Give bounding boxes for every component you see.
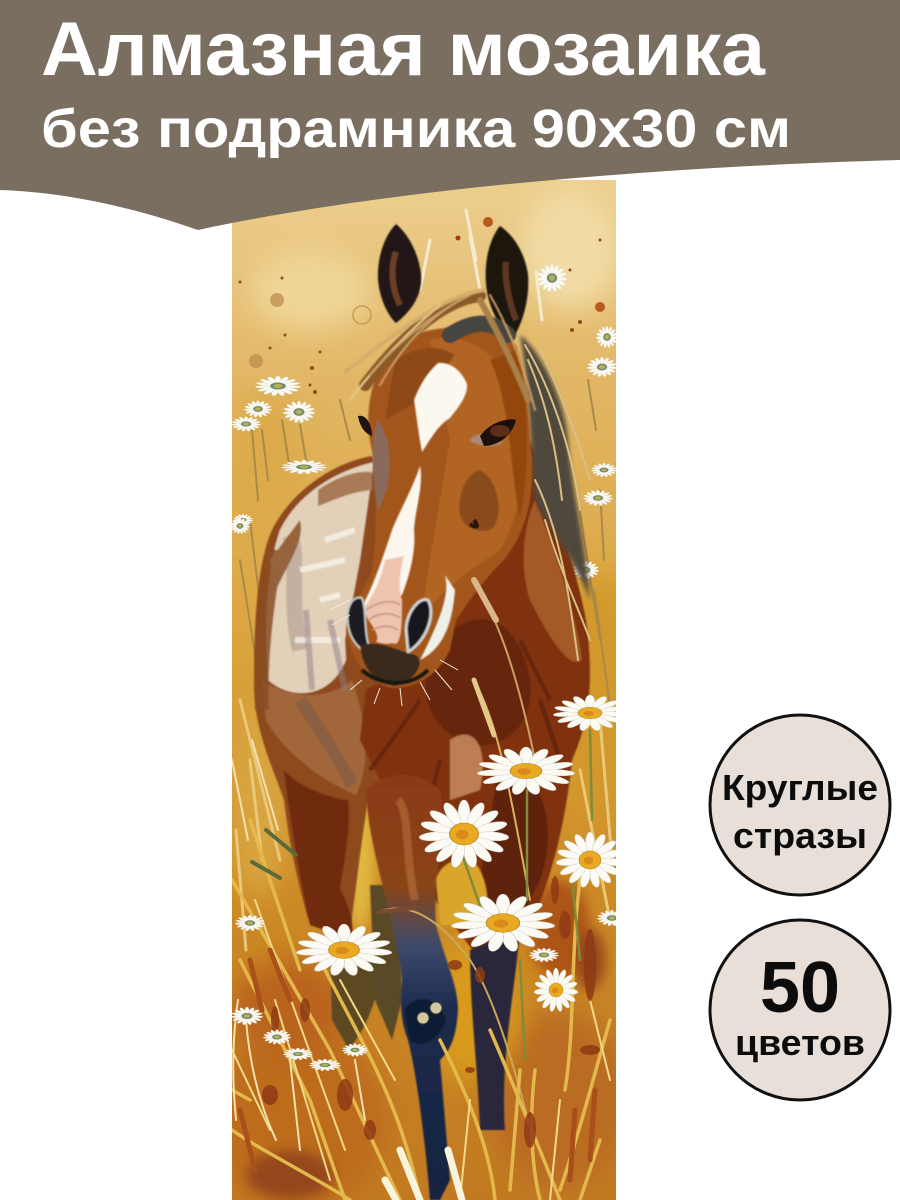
painting background wash	[232, 180, 616, 1200]
red-brown splatters	[262, 876, 600, 1148]
eyes	[358, 416, 516, 527]
large daisies in the foreground	[231, 695, 627, 1071]
seed pods on the hoof	[417, 1002, 442, 1024]
neck and chest	[360, 440, 590, 960]
header banner	[0, 0, 900, 230]
subtitle: без подрамника 90х30 см	[41, 99, 791, 159]
paint splatter spots	[238, 217, 605, 394]
white blaze	[360, 363, 467, 660]
foreground grass	[232, 730, 610, 1200]
hind leg	[284, 770, 352, 940]
badge: round rhinestones	[710, 715, 890, 895]
badge: round rhinestones: стразы	[733, 815, 867, 856]
front leg with dark hoof	[366, 775, 458, 1200]
muzzle and nostrils	[347, 597, 431, 686]
badge: 50 colours	[710, 920, 890, 1100]
horse	[254, 224, 590, 1200]
horse body and back	[253, 455, 380, 922]
yellow gap between the legs	[436, 859, 487, 925]
forelock and top mane	[345, 290, 535, 410]
dried wheat stalks	[378, 580, 535, 1120]
badge: 50 colours: 50	[760, 948, 840, 1028]
mane strands	[525, 345, 590, 660]
right mane	[520, 335, 590, 600]
title: Алмазная мозаика	[41, 7, 766, 92]
muzzle whiskers	[330, 600, 458, 706]
badge: 50 colours: цветов	[735, 1022, 865, 1063]
badge: round rhinestones: Круглые	[722, 767, 878, 808]
small daisies: upper meadow	[230, 264, 618, 579]
head	[346, 327, 532, 688]
rear near leg	[330, 885, 520, 1130]
ears	[378, 224, 528, 340]
painting: horse in a daisy meadow	[232, 180, 616, 1200]
dry grass behind the horse	[236, 210, 612, 950]
